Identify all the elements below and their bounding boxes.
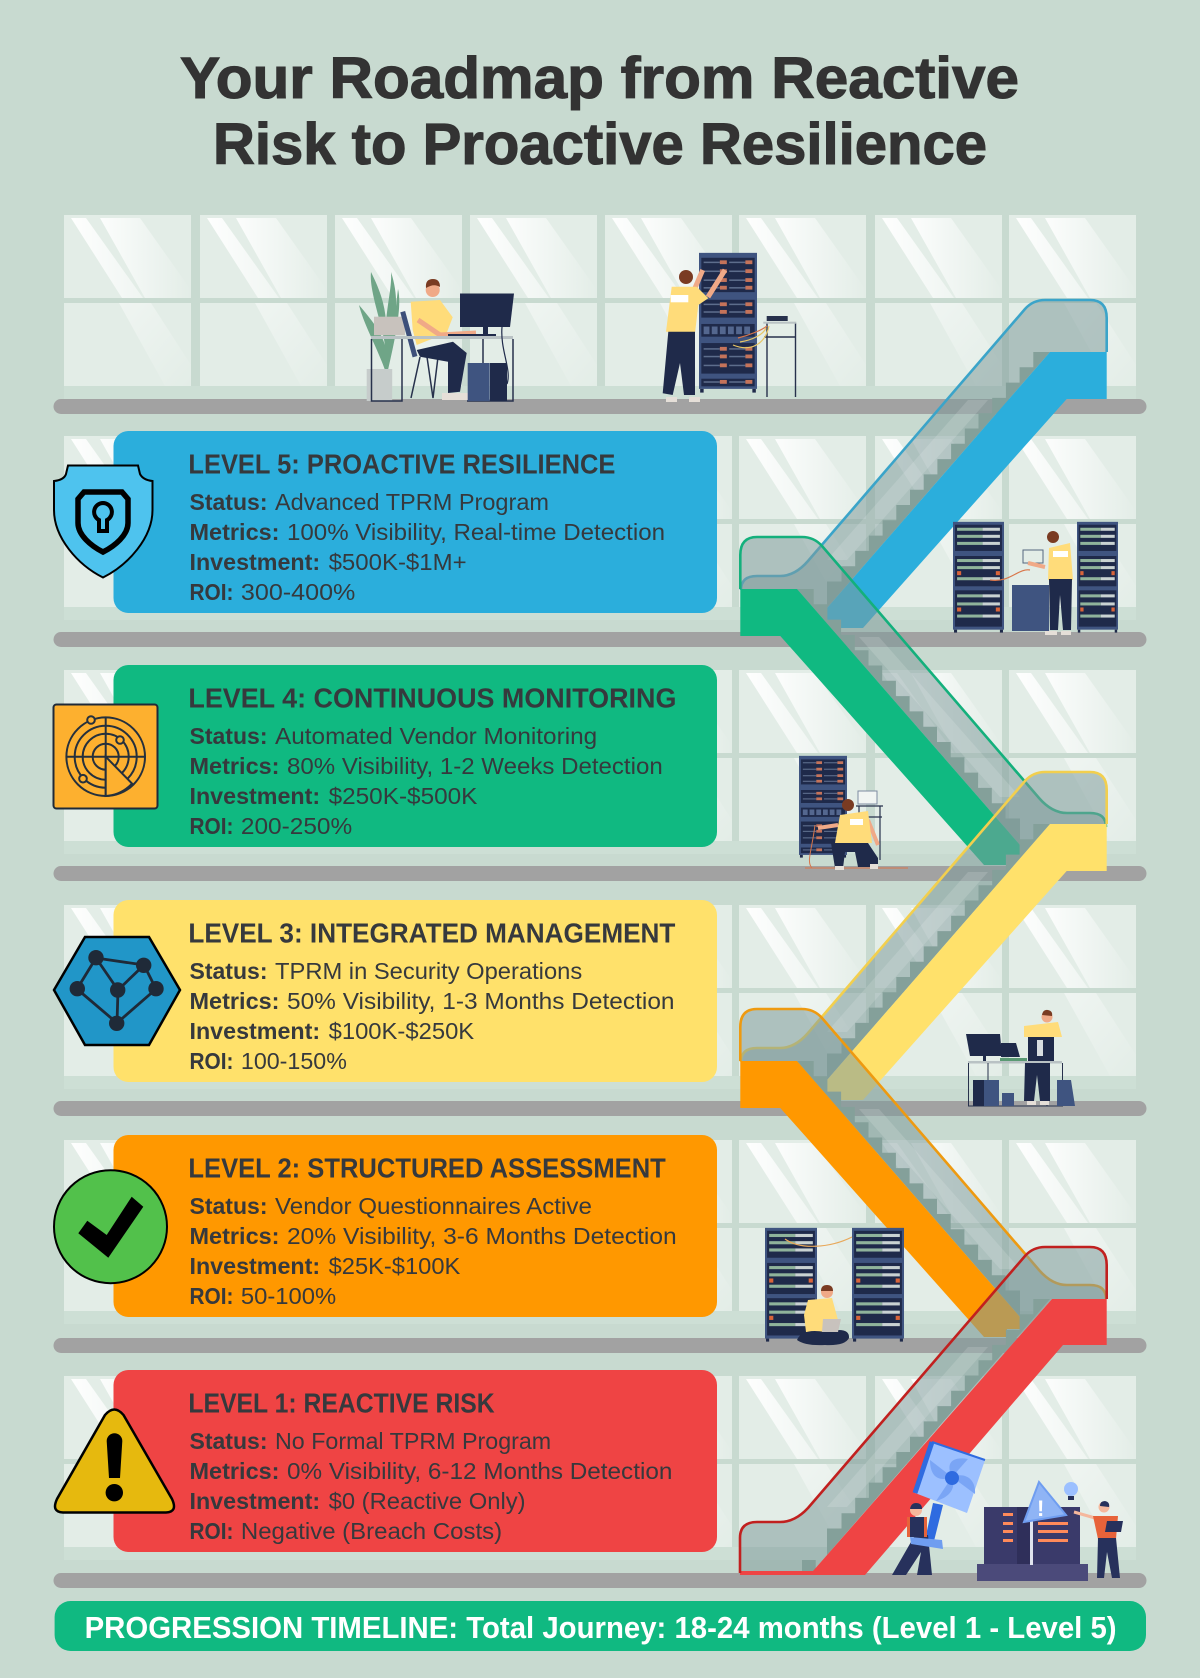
panel: level 1: LEVEL 1: REACTIVE RISK [188,1388,495,1418]
icon: shield with keyhole [54,466,152,578]
panel: level 3 [114,900,717,1082]
panel: level 4: ROI: [190,813,234,839]
panel: level 4 [114,665,717,847]
building windows [64,215,1136,1560]
icon: check mark [54,1170,167,1283]
illustration: man at server rack [663,253,796,402]
illustration: man at desk [359,272,514,401]
panel: level 2: Metrics: [190,1223,280,1249]
panel: level 5: Advanced TPRM Program [275,489,549,515]
escalator: yellow level 3 [741,772,1107,1112]
escalator: red level 1 [740,1247,1107,1575]
panel: level 1: Investment: [190,1488,320,1514]
panel: level 3: Metrics: [190,988,280,1014]
panel: level 2 [114,1135,717,1317]
panel: level 3: TPRM in Security Operations [275,958,582,984]
panel: level 5: Metrics: [190,519,280,545]
panel: level 2: Investment: [190,1253,320,1279]
panel: level 3: 100-150% [241,1048,347,1074]
icon: warning triangle [55,1410,174,1512]
panel: level 4: $250K-$500K [329,783,478,809]
floors [54,399,1146,1588]
panel: level 4: Automated Vendor Monitoring [275,723,597,749]
illustration: server alert with engineer [977,1482,1123,1581]
panel: level 2: $25K-$100K [329,1253,461,1279]
escalator: blue level 5 [741,300,1107,640]
panel: level 1: ROI: [190,1518,234,1544]
illustration: seated technician between racks [765,1228,904,1345]
timeline banner: PROGRESSION TIMELINE: Total Journey: 18-24 months (Level 1 - Level 5) [85,1610,1117,1645]
panel: level 4: 200-250% [241,813,352,839]
panel: level 5: 300-400% [241,579,356,605]
panel: level 3: Investment: [190,1018,320,1044]
panel: level 2: LEVEL 2: STRUCTURED ASSESSMENT [188,1152,666,1184]
panel: level 3: LEVEL 3: INTEGRATED MANAGEMENT [188,918,676,948]
illustration: technician at desk with tower [966,1010,1075,1106]
panel: level 1: Negative (Breach Costs) [241,1518,502,1544]
panel: level 3: Status: [190,958,268,984]
panel: level 1: Metrics: [190,1458,280,1484]
escalator: green level 4 [740,537,1106,877]
title [180,46,1019,177]
title: Risk to Proactive Resilience [213,112,987,177]
panel: level 2: Vendor Questionnaires Active [275,1193,592,1219]
panel: level 4: Status: [190,723,268,749]
illustration: server alert with engineer: ! [1037,1496,1044,1521]
panel: level 3: $100K-$250K [329,1018,475,1044]
panel: level 5 [114,431,717,613]
panel: level 1 [114,1370,717,1552]
icon: network hexagon [54,937,180,1045]
panel: level 1: 0% Visibility, 6-12 Months Detection [287,1458,672,1484]
panel: level 1: No Formal TPRM Program [275,1428,551,1454]
panel: level 5: $500K-$1M+ [329,549,467,575]
panel: level 5: Investment: [190,549,320,575]
panel: level 4: Metrics: [190,753,280,779]
panel: level 2: Status: [190,1193,268,1219]
panel: level 5: 100% Visibility, Real-time Detection [287,519,665,545]
panel: level 5: Status: [190,489,268,515]
illustration: kneeling technician [799,756,908,870]
panel: level 2: ROI: [190,1283,234,1309]
timeline banner [55,1601,1146,1651]
illustration: worker carrying fan [892,1442,985,1575]
title: Your Roadmap from Reactive [180,46,1019,111]
panel: level 3: 50% Visibility, 1-3 Months Detection [287,988,674,1014]
panel: level 1: Status: [190,1428,268,1454]
panel: level 2: 20% Visibility, 3-6 Months Detection [287,1223,677,1249]
illustration: technician with laptop between racks [953,522,1118,635]
icon: radar [54,704,158,808]
panel: level 4: LEVEL 4: CONTINUOUS MONITORING [188,682,676,714]
panel: level 5: ROI: [190,579,234,605]
panel: level 1: $0 (Reactive Only) [329,1488,526,1514]
panel: level 2: 50-100% [241,1283,336,1309]
escalator: orange level 2 [740,1009,1106,1349]
panel: level 4: Investment: [190,783,320,809]
panel: level 4: 80% Visibility, 1-2 Weeks Detection [287,753,663,779]
panel: level 5: LEVEL 5: PROACTIVE RESILIENCE [188,448,615,480]
panel: level 3: ROI: [190,1048,234,1074]
